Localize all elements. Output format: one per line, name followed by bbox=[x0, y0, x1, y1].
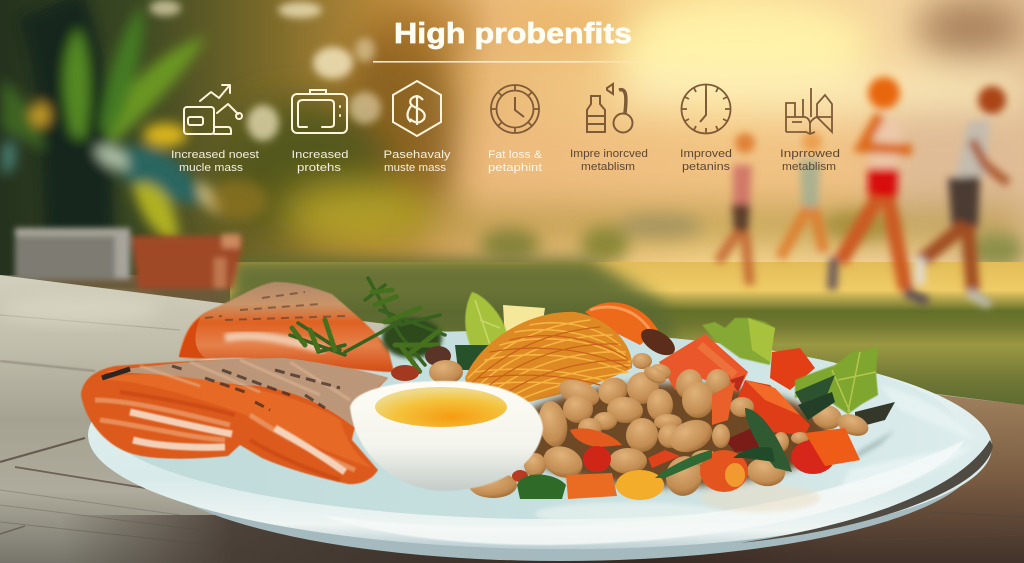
yolk bbox=[375, 387, 507, 427]
bean cluster bbox=[469, 353, 871, 500]
label: Pasehavaly bbox=[384, 149, 451, 161]
red pepper strip bbox=[725, 380, 810, 452]
label: Improved bbox=[680, 148, 732, 160]
icon: book and bars bbox=[786, 88, 832, 134]
blurred runners bbox=[718, 77, 1008, 305]
icon: bottle and loop bbox=[587, 84, 632, 132]
salmon fillet front bbox=[81, 358, 388, 484]
benefit: fat loss bbox=[488, 85, 543, 174]
benefit: improved metabolism (book): metablism bbox=[782, 161, 836, 173]
lawn bbox=[230, 258, 1024, 410]
benefit: increased muscle mass: mucle mass bbox=[179, 162, 244, 174]
label: Inprrowed bbox=[780, 148, 840, 160]
icon: clock bbox=[682, 84, 730, 134]
carrot slice back bbox=[585, 302, 658, 345]
label: Fat loss & bbox=[488, 149, 543, 161]
beans and vegetables bbox=[391, 323, 871, 500]
runner far right bbox=[920, 86, 1008, 305]
title: High probenfits bbox=[394, 18, 632, 50]
herb garnish bbox=[290, 278, 445, 372]
benefit: improved metabolism (bottle): metablism bbox=[581, 161, 635, 173]
plate bbox=[87, 325, 993, 561]
benefit: improved proteins (clock): petanins bbox=[682, 161, 731, 173]
runner left bbox=[718, 133, 755, 285]
large tomato slice bbox=[659, 334, 748, 392]
benefit: improved metabolism (bottle) bbox=[570, 84, 648, 173]
benefit: increased proteins bbox=[292, 90, 348, 174]
icon: compass clock bbox=[491, 85, 539, 133]
runner red shorts bbox=[832, 77, 928, 302]
lettuce and lemon back left bbox=[455, 292, 545, 370]
benefit: muscle mass hexagon bbox=[384, 81, 451, 174]
salmon fillet back bbox=[179, 282, 394, 372]
label: Increased bbox=[292, 149, 348, 161]
benefit: fat loss: petaphint bbox=[488, 162, 542, 174]
red and orange vegetables bbox=[512, 382, 860, 500]
dark kidney bean bbox=[637, 323, 679, 361]
shredded carrot bbox=[465, 312, 632, 410]
greens and tomato back right bbox=[702, 318, 895, 428]
icon: chart and scale bbox=[184, 85, 242, 134]
icon: hexagon bbox=[393, 81, 441, 136]
runner mid bbox=[780, 132, 824, 258]
green beans bbox=[655, 392, 835, 478]
icon: screen bbox=[292, 90, 347, 133]
benefit: improved metabolism (book) bbox=[780, 88, 840, 173]
boiled egg bbox=[350, 381, 543, 491]
benefit: muscle mass hexagon: muste mass bbox=[384, 162, 447, 174]
label: Increased noest bbox=[171, 149, 259, 161]
benefit: increased proteins: protehs bbox=[297, 162, 342, 174]
wooden table bbox=[0, 275, 1024, 563]
label: Impre inorcved bbox=[570, 148, 648, 160]
benefit: increased muscle mass bbox=[171, 85, 259, 174]
benefit: improved proteins (clock) bbox=[680, 84, 732, 173]
food shadow base bbox=[510, 383, 830, 487]
potted plant bbox=[2, 5, 268, 289]
blurred park background bbox=[0, 0, 1024, 410]
